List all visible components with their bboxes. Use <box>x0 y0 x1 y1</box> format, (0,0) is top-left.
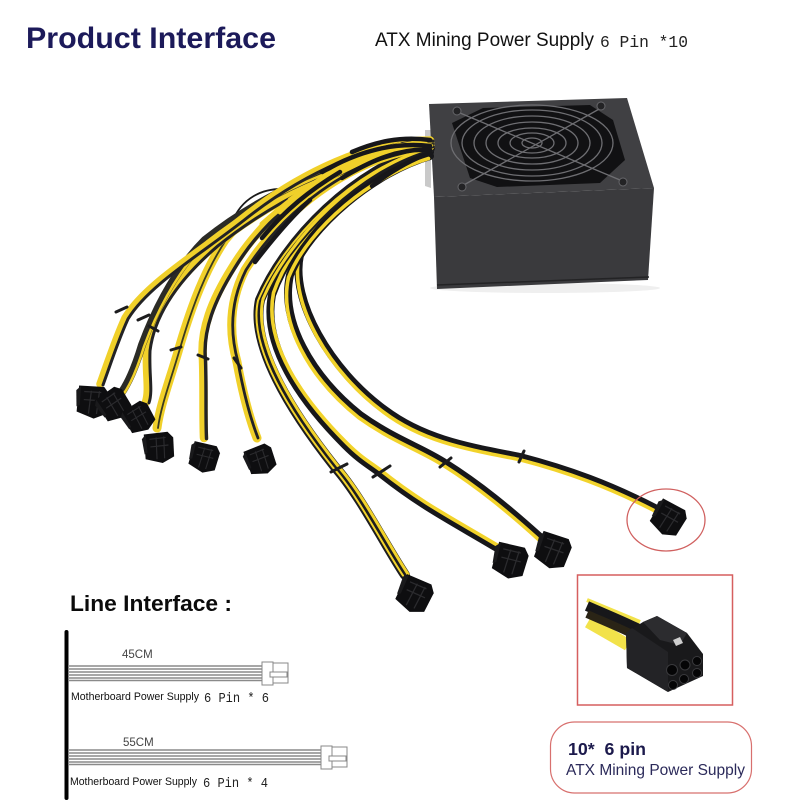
subtitle <box>375 29 688 53</box>
callout: 10 x 6 pin <box>550 722 752 793</box>
cable to connector D <box>157 141 431 428</box>
cable to connector G <box>256 147 433 576</box>
main trunk <box>64 630 68 800</box>
callout: 10 x 6 pin: ATX Mining Power Supply <box>566 762 745 779</box>
wire bundle 55CM: Motherboard Power Supply <box>70 776 197 788</box>
cable to connector E <box>203 143 432 438</box>
callout: 10 x 6 pin: 10* 6 pin <box>568 739 646 759</box>
fan <box>451 102 627 191</box>
thin black wire <box>222 189 285 236</box>
wire bundle 45CM: Motherboard Power Supply <box>71 691 199 703</box>
subtitle: ATX Mining Power Supply <box>375 29 594 51</box>
wire bundle 45CM: 6 Pin * 6 <box>204 692 269 707</box>
wire bundle 55CM <box>68 737 347 792</box>
cable to connector I <box>287 156 540 540</box>
wire bundle 45CM <box>68 649 288 707</box>
detail box: 6 pin connector <box>578 575 732 705</box>
title: Product Interface <box>26 22 276 55</box>
wire bundle 45CM: 45CM <box>122 649 153 661</box>
subtitle: 6 Pin *10 <box>600 34 688 53</box>
dense wires at the fan-out <box>262 142 425 224</box>
cable ties <box>116 307 524 477</box>
power supply unit <box>425 98 660 293</box>
cable to connector A <box>100 140 433 385</box>
connectors <box>72 382 691 618</box>
cable to connector C <box>146 146 433 403</box>
cable to connector F <box>232 146 431 438</box>
red circle highlight <box>627 489 705 551</box>
wire bundle 55CM: 6 Pin * 4 <box>203 777 268 792</box>
cable to connector B <box>122 144 432 394</box>
cable to connector H <box>270 148 498 548</box>
heading: line interface: Line Interface : <box>70 591 232 616</box>
wire bundle 55CM: 55CM <box>123 737 154 749</box>
line interface diagram <box>64 630 347 800</box>
cable bundle <box>100 139 655 576</box>
cable to connector J <box>297 152 655 510</box>
